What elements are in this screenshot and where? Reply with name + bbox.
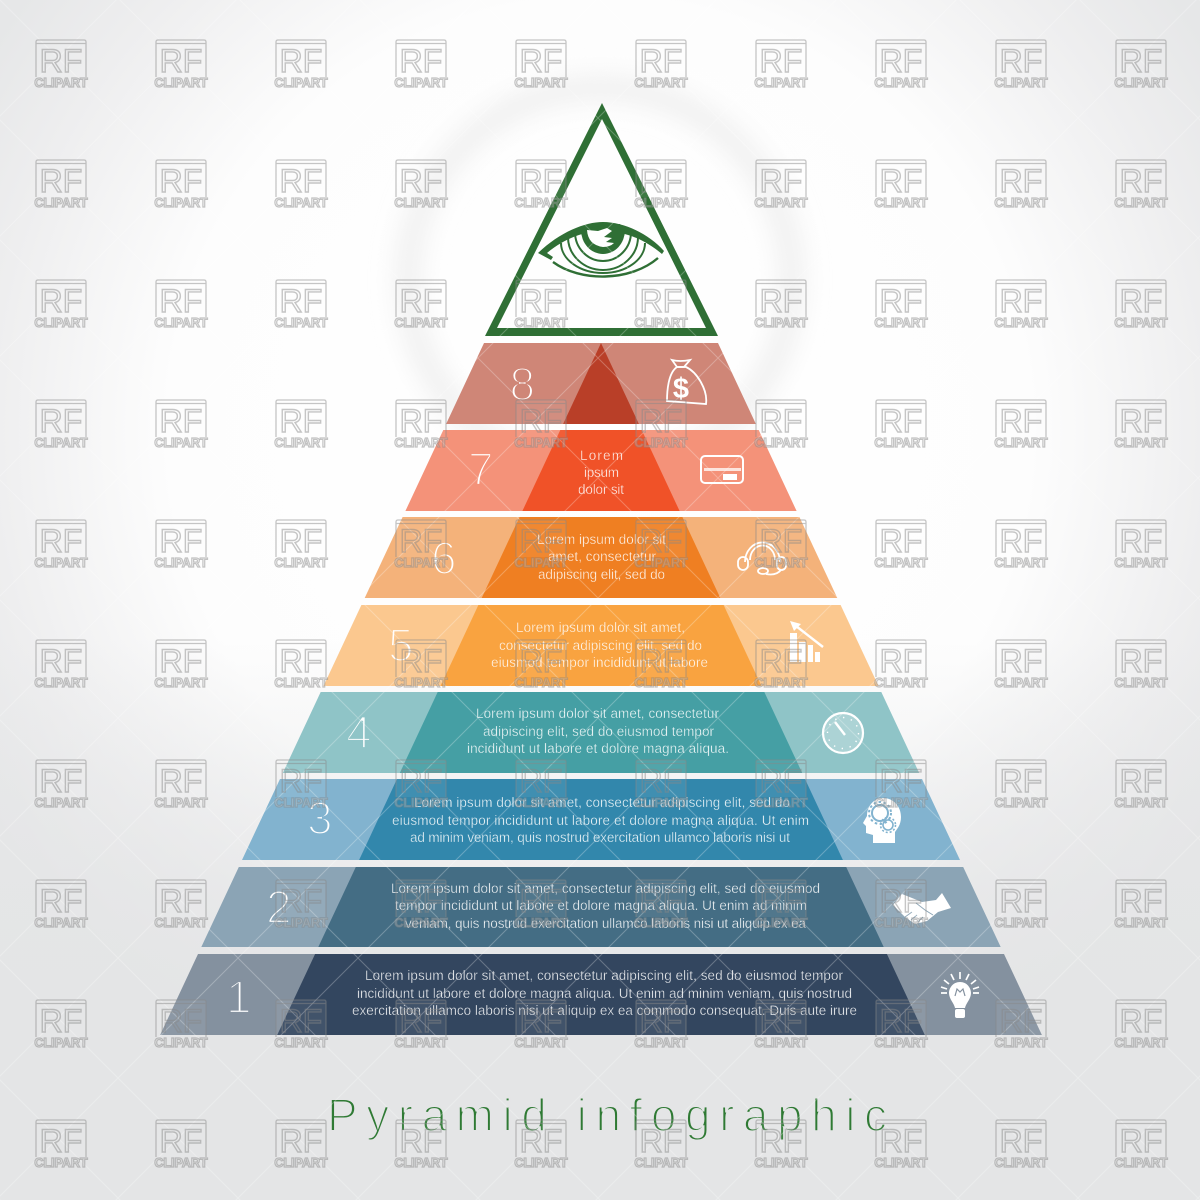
text 1: exercitation ullamco laboris nisi ut aliquip ex ea commodo consequat. Duis aute irure (352, 1003, 857, 1018)
watermark grid: CLIPART (1114, 316, 1168, 330)
watermark grid: CLIPART (994, 436, 1048, 450)
watermark grid: RF (280, 763, 322, 799)
text 6: Lorem ipsum dolor sit (537, 532, 666, 547)
watermark grid: RF (640, 43, 682, 79)
watermark grid: RF (400, 1123, 442, 1159)
text 4: adipiscing elit, sed do eiusmod tempor (483, 724, 714, 739)
watermark grid: CLIPART (754, 436, 808, 450)
watermark grid: CLIPART (634, 196, 688, 210)
watermark grid: RF (400, 43, 442, 79)
watermark grid: RF (520, 43, 562, 79)
watermark grid: RF (1000, 763, 1042, 799)
watermark grid: CLIPART (514, 76, 568, 90)
watermark grid: RF (160, 643, 202, 679)
watermark grid: CLIPART (394, 1036, 448, 1050)
watermark grid: CLIPART (154, 796, 208, 810)
watermark grid: RF (520, 523, 562, 559)
watermark grid: RF (880, 763, 922, 799)
watermark grid: CLIPART (754, 796, 808, 810)
watermark grid: CLIPART (274, 76, 328, 90)
text 5: Lorem ipsum dolor sit amet, (516, 620, 685, 635)
watermark grid: CLIPART (274, 796, 328, 810)
watermark grid: RF (400, 163, 442, 199)
watermark grid: CLIPART (154, 916, 208, 930)
text 5 (491, 620, 708, 670)
watermark grid: CLIPART (754, 916, 808, 930)
text 6: amet, consectetur (548, 549, 656, 564)
watermark grid: RF (40, 1123, 82, 1159)
watermark grid: CLIPART (634, 1036, 688, 1050)
watermark grid: CLIPART (874, 1036, 928, 1050)
band 6 (365, 517, 837, 598)
watermark grid: RF (40, 523, 82, 559)
watermark grid: RF (760, 1003, 802, 1039)
watermark grid: RF (1000, 883, 1042, 919)
watermark grid: RF (400, 1003, 442, 1039)
watermark grid: CLIPART (1114, 916, 1168, 930)
watermark grid: RF (1000, 643, 1042, 679)
watermark grid: CLIPART (394, 316, 448, 330)
watermark grid: CLIPART (154, 316, 208, 330)
icon: all-seeing eye triangle (485, 103, 718, 336)
text 4: incididunt ut labore et dolore magna aliqua. (467, 741, 729, 756)
watermark grid: RF (160, 1003, 202, 1039)
text 2 (391, 881, 820, 931)
watermark grid: CLIPART (634, 556, 688, 570)
watermark grid: CLIPART (274, 436, 328, 450)
text 4: Lorem ipsum dolor sit amet, consectetur (476, 706, 720, 721)
text 4 (467, 706, 729, 756)
watermark grid: CLIPART (514, 1036, 568, 1050)
watermark grid: RF (1120, 643, 1162, 679)
watermark grid: CLIPART (1114, 556, 1168, 570)
icon: money bag (667, 360, 706, 405)
watermark grid: CLIPART (274, 556, 328, 570)
text 2: Lorem ipsum dolor sit amet, consectetur adipiscing elit, sed do eiusmod (391, 881, 820, 896)
watermark grid: RF (880, 643, 922, 679)
text 7 (578, 448, 624, 497)
watermark grid: RF (280, 1123, 322, 1159)
text 3: Lorem ipsum dolor sit amet, consectetur adipiscing elit, sed do (414, 795, 790, 810)
watermark grid: RF (40, 1003, 82, 1039)
watermark grid: RF (880, 883, 922, 919)
watermark grid: RF (760, 763, 802, 799)
watermark grid: CLIPART (874, 196, 928, 210)
icon: money bag: $ (673, 373, 689, 405)
watermark grid: RF (640, 883, 682, 919)
watermark grid: RF (520, 1003, 562, 1039)
watermark grid: RF (1000, 403, 1042, 439)
watermark grid: CLIPART (154, 1036, 208, 1050)
watermark grid: RF (760, 163, 802, 199)
watermark grid: RF (640, 1003, 682, 1039)
watermark grid: RF (280, 403, 322, 439)
watermark grid: RF (640, 643, 682, 679)
watermark grid: RF (760, 883, 802, 919)
watermark grid: RF (160, 1123, 202, 1159)
watermark grid: RF (40, 883, 82, 919)
watermark grid: RF (760, 43, 802, 79)
text 3: ad minim veniam, quis nostrud exercitation ullamco laboris nisi ut (410, 830, 790, 845)
band 4: 4 (346, 706, 372, 758)
watermark grid: RF (40, 643, 82, 679)
text 5: eiusmod tempor incididunt ut labore (491, 655, 708, 670)
icon: light bulb (941, 972, 979, 1018)
watermark grid: RF (400, 883, 442, 919)
watermark grid: CLIPART (994, 676, 1048, 690)
watermark grid: CLIPART (394, 76, 448, 90)
text 2: tempor incididunt ut labore et dolore magna aliqua. Ut enim ad minim (395, 898, 807, 913)
watermark grid: CLIPART (154, 196, 208, 210)
watermark grid: CLIPART (634, 796, 688, 810)
band 5: 5 (388, 619, 414, 671)
watermark grid: CLIPART (754, 1036, 808, 1050)
watermark grid: RF (400, 763, 442, 799)
watermark grid: RF (160, 283, 202, 319)
watermark grid: RF (1120, 1003, 1162, 1039)
watermark grid: RF (640, 1123, 682, 1159)
watermark grid: RF (520, 1123, 562, 1159)
watermark grid: RF (760, 283, 802, 319)
watermark grid: CLIPART (874, 676, 928, 690)
icon: headset (738, 542, 786, 574)
watermark grid: CLIPART (994, 916, 1048, 930)
watermark grid: CLIPART (754, 76, 808, 90)
watermark grid: RF (160, 883, 202, 919)
watermark grid: RF (1000, 163, 1042, 199)
watermark grid: CLIPART (154, 676, 208, 690)
watermark grid: RF (280, 1003, 322, 1039)
watermark grid: RF (160, 523, 202, 559)
watermark grid: RF (40, 403, 82, 439)
watermark grid: RF (280, 643, 322, 679)
watermark grid: RF (880, 1003, 922, 1039)
watermark grid: RF (880, 43, 922, 79)
watermark grid: CLIPART (514, 676, 568, 690)
text 1: Lorem ipsum dolor sit amet, consectetur adipiscing elit, sed do eiusmod tempor (365, 968, 844, 983)
watermark grid: CLIPART (514, 556, 568, 570)
watermark grid: RF (160, 43, 202, 79)
watermark grid: RF (880, 163, 922, 199)
watermark grid: RF (1000, 283, 1042, 319)
watermark grid: RF (520, 403, 562, 439)
watermark grid: RF (1120, 403, 1162, 439)
watermark grid: CLIPART (394, 556, 448, 570)
watermark grid: RF (1000, 43, 1042, 79)
watermark grid: CLIPART (634, 916, 688, 930)
watermark grid: RF (520, 283, 562, 319)
watermark grid: CLIPART (154, 1156, 208, 1170)
watermark grid: CLIPART (634, 436, 688, 450)
watermark grid: RF (880, 283, 922, 319)
text 1 (352, 968, 857, 1018)
watermark grid: RF (280, 163, 322, 199)
text 5: consectetur adipiscing elit, sed do (499, 638, 702, 653)
watermark grid: CLIPART (514, 1156, 568, 1170)
watermark grid: CLIPART (34, 1036, 88, 1050)
icon: head with gears (863, 798, 901, 843)
watermark grid: CLIPART (34, 916, 88, 930)
watermark grid: CLIPART (754, 316, 808, 330)
watermark grid: RF (280, 523, 322, 559)
band 2 (201, 867, 1001, 947)
watermark grid: CLIPART (154, 556, 208, 570)
text 6 (537, 532, 666, 582)
band 1 (160, 954, 1042, 1035)
watermark grid: CLIPART (34, 1156, 88, 1170)
text 1: incididunt ut labore et dolore magna aliqua. Ut enim ad minim veniam, quis nostrud (357, 986, 852, 1001)
watermark grid: CLIPART (1114, 1036, 1168, 1050)
watermark grid: RF (280, 43, 322, 79)
text 6: adipiscing elit, sed do (538, 567, 665, 582)
watermark grid: RF (400, 643, 442, 679)
watermark grid: CLIPART (274, 316, 328, 330)
watermark grid: CLIPART (754, 196, 808, 210)
watermark grid: RF (760, 403, 802, 439)
watermark grid: CLIPART (274, 196, 328, 210)
watermark grid: RF (400, 523, 442, 559)
watermark grid: RF (160, 403, 202, 439)
watermark grid: CLIPART (994, 1156, 1048, 1170)
watermark grid: RF (1000, 1003, 1042, 1039)
watermark grid: CLIPART (754, 1156, 808, 1170)
watermark grid: CLIPART (754, 676, 808, 690)
watermark grid: CLIPART (34, 76, 88, 90)
band 7 (405, 430, 797, 511)
text 7: ipsum (584, 465, 619, 480)
watermark grid: RF (400, 403, 442, 439)
watermark grid: CLIPART (154, 76, 208, 90)
watermark grid: CLIPART (514, 796, 568, 810)
watermark grid: CLIPART (274, 916, 328, 930)
watermark grid: RF (1120, 1123, 1162, 1159)
text 2: veniam, quis nostrud exercitation ullamco laboris nisi ut aliquip ex ea (405, 916, 806, 931)
watermark grid: CLIPART (1114, 676, 1168, 690)
watermark grid: CLIPART (1114, 1156, 1168, 1170)
watermark grid: CLIPART (1114, 196, 1168, 210)
text 7: Lorem (580, 448, 623, 463)
title: Pyramid infographic (327, 1089, 887, 1141)
watermark grid: CLIPART (634, 1156, 688, 1170)
band 8 (446, 343, 756, 424)
watermark grid: RF (880, 1123, 922, 1159)
watermark grid: RF (640, 283, 682, 319)
watermark grid: RF (760, 1123, 802, 1159)
watermark grid: CLIPART (34, 796, 88, 810)
watermark grid: RF (40, 163, 82, 199)
watermark grid: RF (520, 643, 562, 679)
watermark grid: CLIPART (874, 1156, 928, 1170)
watermark grid: CLIPART (394, 676, 448, 690)
watermark grid: CLIPART (874, 916, 928, 930)
watermark grid: CLIPART (274, 1036, 328, 1050)
watermark grid: CLIPART (1114, 436, 1168, 450)
pyramid (160, 343, 1042, 1035)
watermark grid: CLIPART (514, 916, 568, 930)
watermark grid: CLIPART (394, 1156, 448, 1170)
watermark grid: RF (1120, 763, 1162, 799)
watermark grid: CLIPART (994, 796, 1048, 810)
watermark grid: CLIPART (34, 676, 88, 690)
watermark grid: RF (1000, 523, 1042, 559)
watermark grid: CLIPART (394, 436, 448, 450)
watermark grid: RF (1120, 163, 1162, 199)
band 2: 2 (266, 881, 292, 933)
watermark grid: RF (640, 403, 682, 439)
watermark grid: CLIPART (274, 1156, 328, 1170)
icon: declining chart (790, 621, 823, 662)
watermark grid: CLIPART (34, 196, 88, 210)
band 6: 6 (431, 532, 457, 584)
watermark grid: CLIPART (514, 436, 568, 450)
watermark grid: RF (1120, 883, 1162, 919)
watermark grid: RF (520, 883, 562, 919)
band 8: 8 (510, 358, 535, 410)
icon: handshake (893, 893, 951, 924)
watermark grid: RF (1120, 523, 1162, 559)
watermark grid: CLIPART (1114, 76, 1168, 90)
watermark grid: RF (280, 883, 322, 919)
watermark grid: CLIPART (154, 436, 208, 450)
watermark grid: CLIPART (874, 436, 928, 450)
watermark grid: CLIPART (874, 796, 928, 810)
watermark grid: RF (1120, 43, 1162, 79)
watermark grid: RF (880, 523, 922, 559)
band 1: 1 (226, 971, 252, 1023)
watermark grid: RF (40, 43, 82, 79)
watermark grid: RF (160, 763, 202, 799)
watermark grid: CLIPART (994, 196, 1048, 210)
watermark grid: CLIPART (394, 196, 448, 210)
watermark grid: RF (640, 763, 682, 799)
watermark grid: CLIPART (994, 1036, 1048, 1050)
watermark grid: CLIPART (874, 316, 928, 330)
watermark grid: CLIPART (34, 436, 88, 450)
watermark grid: CLIPART (634, 676, 688, 690)
text 3: eiusmod tempor incididunt ut labore et dolore magna aliqua. Ut enim (392, 813, 809, 828)
band 5 (324, 605, 878, 686)
watermark grid: RF (520, 163, 562, 199)
watermark grid: RF (1000, 1123, 1042, 1159)
watermark grid: RF (400, 283, 442, 319)
watermark grid: RF (640, 523, 682, 559)
text 3 (392, 795, 809, 845)
text 7: dolor sit (578, 482, 624, 497)
watermark grid: RF (520, 763, 562, 799)
watermark grid: CLIPART (874, 76, 928, 90)
watermark grid: CLIPART (394, 796, 448, 810)
watermark grid: RF (280, 283, 322, 319)
watermark grid: RF (160, 163, 202, 199)
watermark grid: CLIPART (274, 676, 328, 690)
icon: credit card (701, 456, 743, 483)
watermark grid: CLIPART (754, 556, 808, 570)
watermark grid: CLIPART (1114, 796, 1168, 810)
band 4 (283, 692, 919, 773)
watermark grid: CLIPART (34, 556, 88, 570)
watermark grid: CLIPART (634, 76, 688, 90)
watermark grid: CLIPART (994, 316, 1048, 330)
watermark grid: RF (1120, 283, 1162, 319)
watermark grid: RF (40, 283, 82, 319)
band 3 (242, 779, 960, 860)
icon: clock (823, 713, 863, 753)
watermark grid: CLIPART (634, 316, 688, 330)
band 3: 3 (307, 792, 333, 844)
watermark grid: CLIPART (514, 196, 568, 210)
watermark grid: RF (880, 403, 922, 439)
watermark grid: CLIPART (34, 316, 88, 330)
watermark grid: CLIPART (994, 76, 1048, 90)
watermark grid: RF (760, 523, 802, 559)
watermark grid: CLIPART (394, 916, 448, 930)
watermark grid: CLIPART (514, 316, 568, 330)
watermark grid: RF (40, 763, 82, 799)
icon: eye (538, 222, 664, 277)
watermark grid: RF (640, 163, 682, 199)
watermark grid: RF (760, 643, 802, 679)
watermark grid: CLIPART (874, 556, 928, 570)
band 7: 7 (468, 443, 494, 495)
watermark grid: CLIPART (994, 556, 1048, 570)
